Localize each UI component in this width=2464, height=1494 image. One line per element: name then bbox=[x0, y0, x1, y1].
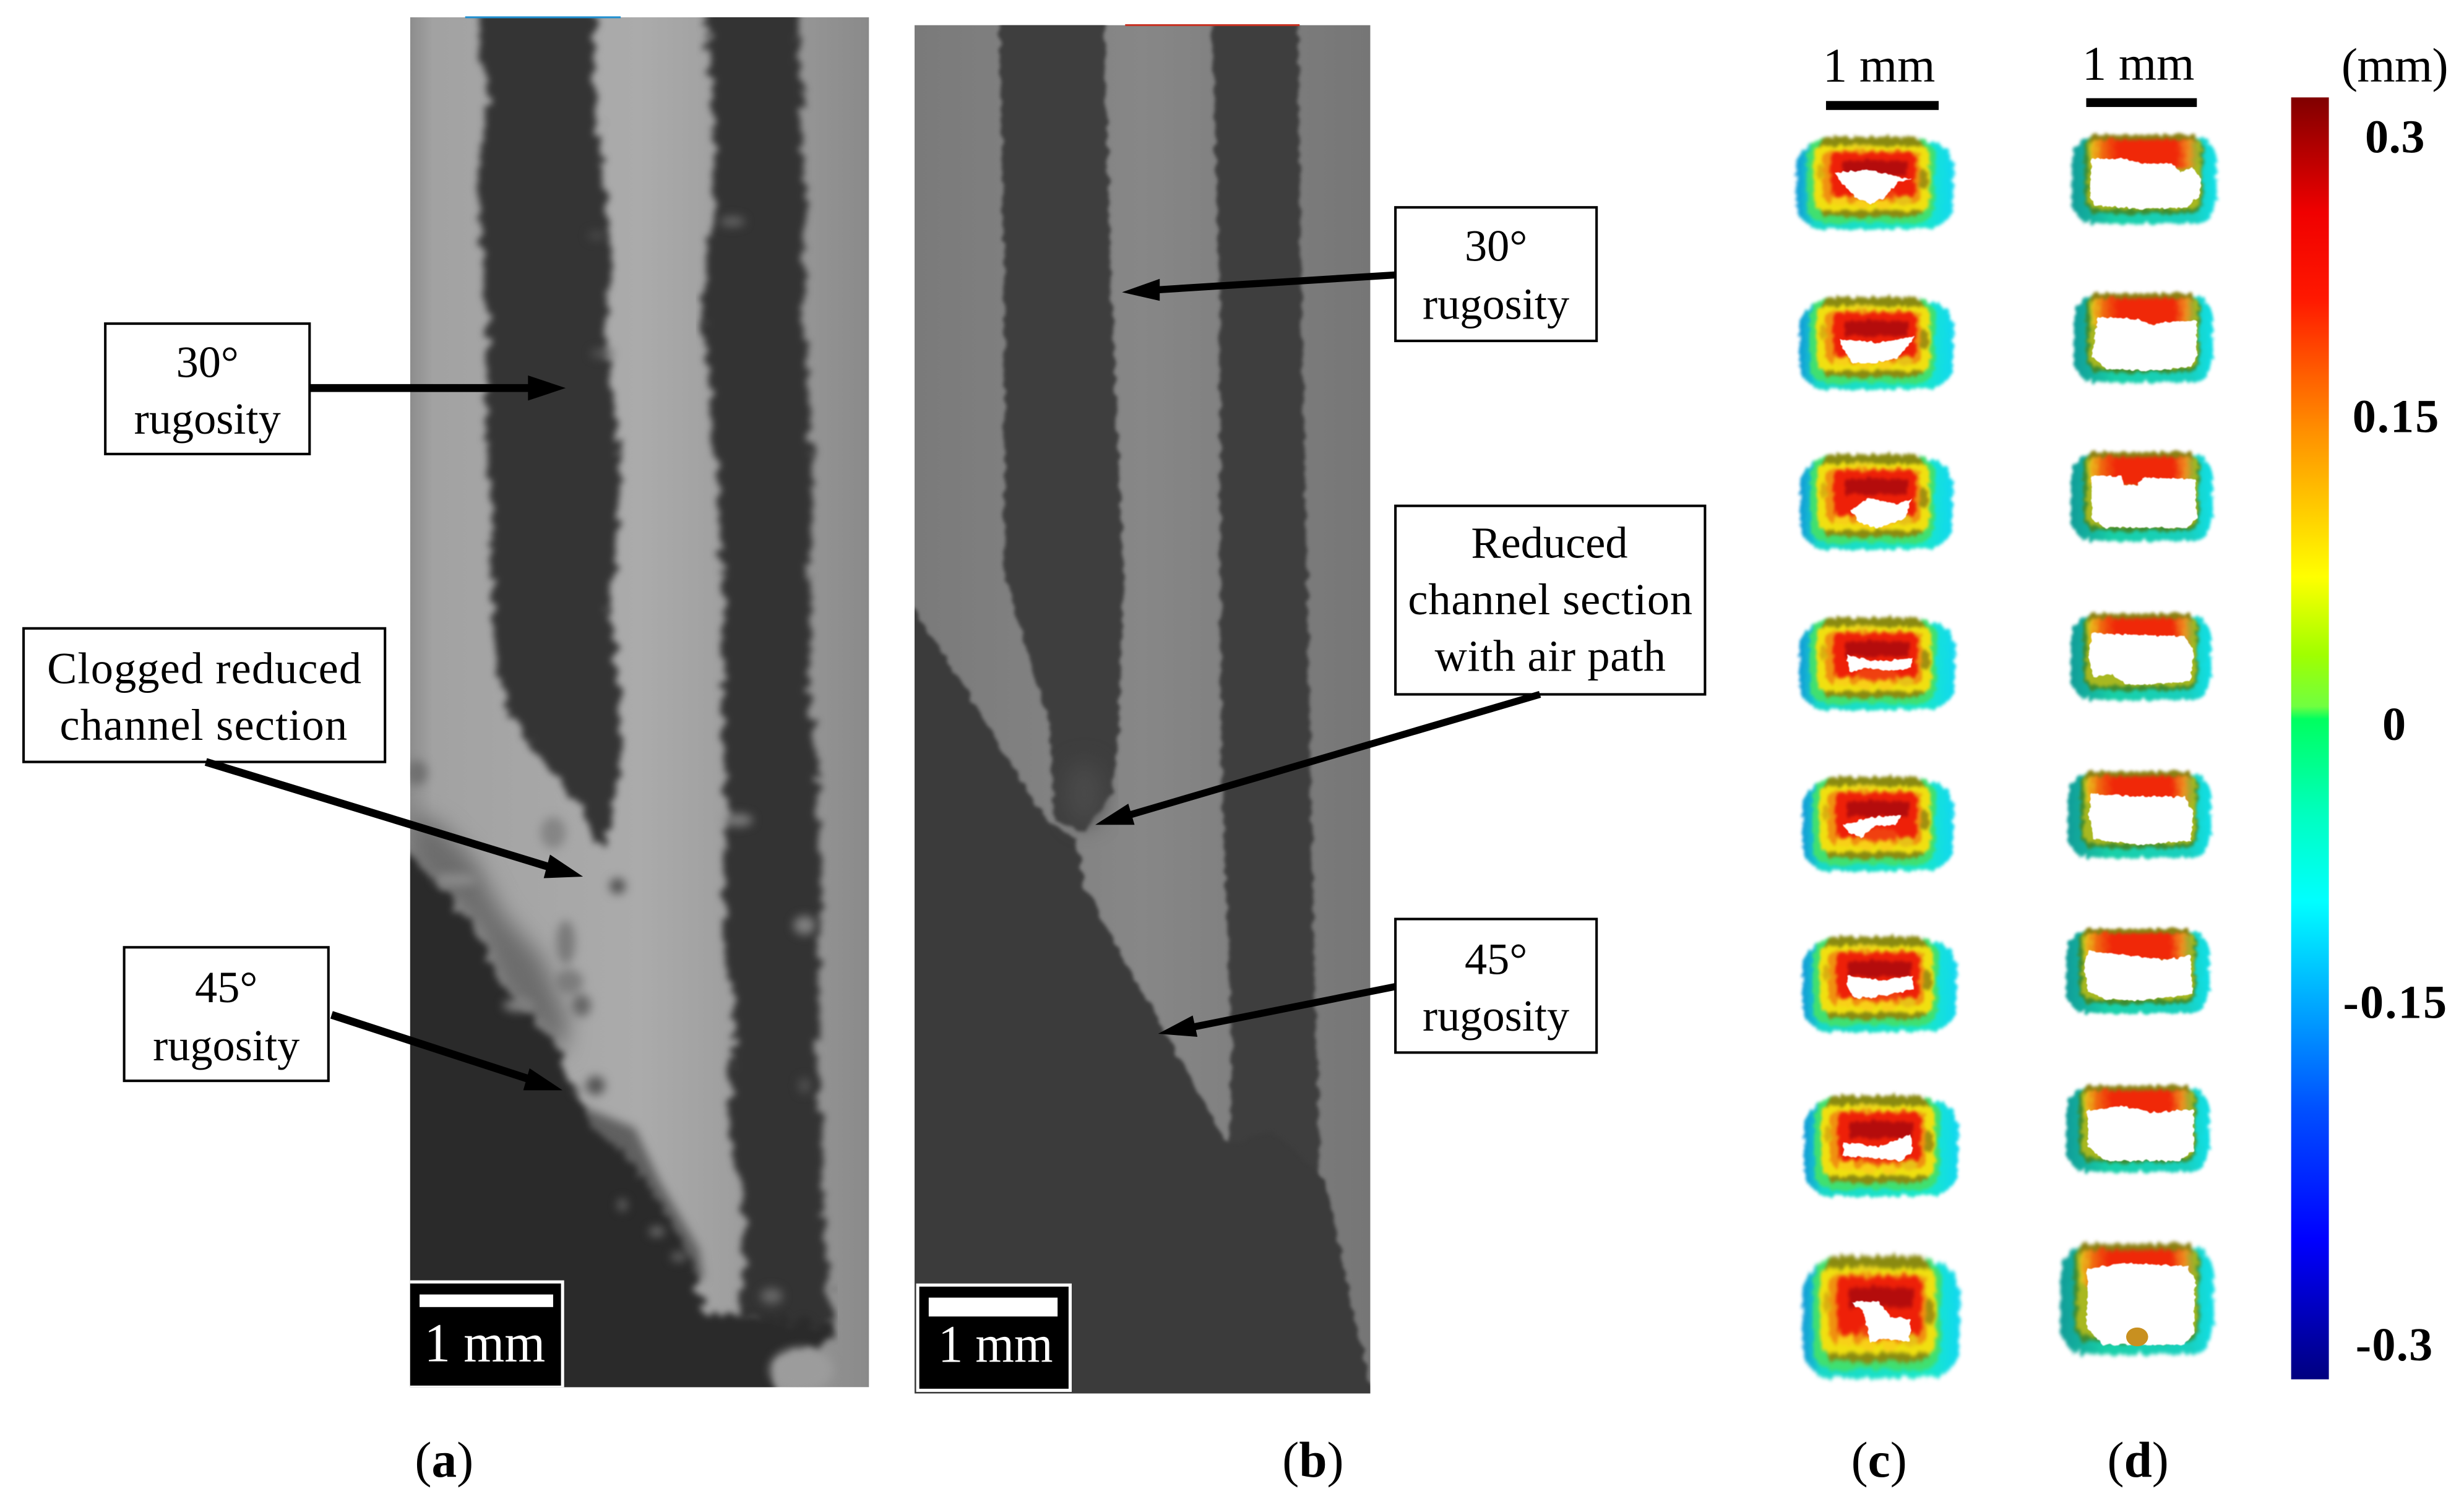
callout b: 30 rugosity bbox=[1395, 207, 1596, 341]
scale value 0.3: 0.3 bbox=[2365, 111, 2425, 163]
callout a: 45 rugosity bbox=[124, 947, 329, 1081]
scale c: 1 mm bbox=[1823, 39, 1935, 93]
edge band bbox=[585, 1107, 704, 1281]
arrow b: 30 rugosity bbox=[1122, 275, 1395, 301]
channel 2 bbox=[702, 0, 831, 1336]
callout b: reduced channel with air path: channel section bbox=[1408, 575, 1692, 624]
transition zone bbox=[410, 812, 569, 1055]
callout b: 45 rugosity bbox=[1395, 919, 1596, 1052]
lower dark region bbox=[393, 841, 831, 1414]
column c: deviation maps bbox=[1796, 137, 1960, 1378]
callout b: reduced channel with air path bbox=[1395, 506, 1705, 694]
map d6 bbox=[2066, 929, 2210, 1013]
map d1 bbox=[2072, 135, 2216, 223]
callout b: reduced channel with air path: Reduced bbox=[1471, 518, 1628, 567]
callout b: 45 rugosity: rugosity bbox=[1423, 991, 1569, 1041]
label d: (d) bbox=[2108, 1432, 2169, 1488]
map c1 bbox=[1796, 137, 1954, 230]
arrow a: 30 rugosity bbox=[309, 376, 566, 401]
map c6 bbox=[1803, 937, 1957, 1032]
panel a: micrograph bbox=[393, 0, 869, 1414]
callout a: 30 rugosity: 30° bbox=[176, 337, 239, 387]
scale d: 1 mm bbox=[2082, 37, 2194, 91]
unit label: (mm) bbox=[2341, 39, 2449, 93]
colour bar bbox=[2291, 39, 2449, 1380]
channel 1 bbox=[996, 0, 1124, 833]
map c7 bbox=[1804, 1096, 1958, 1196]
callout b: 30 rugosity: 30° bbox=[1465, 221, 1527, 271]
map c3 bbox=[1800, 454, 1952, 549]
callout a: clogged channel: Clogged reduced bbox=[47, 644, 361, 693]
callout a: 30 rugosity bbox=[105, 324, 309, 454]
air path haze bbox=[1066, 762, 1103, 825]
panel b: micrograph bbox=[896, 0, 1383, 1414]
callout a: 30 rugosity: rugosity bbox=[134, 394, 281, 444]
scale bar a: 1 mm bbox=[424, 1313, 545, 1373]
scale bar b bbox=[916, 1284, 1072, 1392]
map c5 bbox=[1803, 776, 1954, 871]
callout a: clogged channel: channel section bbox=[60, 700, 347, 750]
scale bar a bbox=[410, 1281, 564, 1387]
channel 1 bbox=[468, 0, 622, 845]
arrow a: clogged channel bbox=[206, 762, 583, 878]
top blue line bbox=[465, 16, 621, 18]
callout a: 45 rugosity: rugosity bbox=[153, 1021, 299, 1070]
scale value -0.15: -0.15 bbox=[2343, 977, 2447, 1029]
scale value -0.3: -0.3 bbox=[2356, 1319, 2432, 1371]
end blob bbox=[770, 1348, 833, 1392]
map d7 bbox=[2066, 1086, 2210, 1172]
callout b: 30 rugosity: rugosity bbox=[1423, 280, 1569, 329]
channel 2 bbox=[1208, 25, 1323, 1180]
map c4 bbox=[1799, 617, 1955, 710]
map d4 bbox=[2071, 614, 2211, 700]
arrow a: 45 rugosity bbox=[332, 1015, 562, 1090]
callout a: 45 rugosity: 45° bbox=[195, 963, 257, 1012]
arrow b: reduced channel bbox=[1095, 694, 1540, 825]
scale value 0: 0 bbox=[2382, 698, 2406, 750]
label a: (a) bbox=[415, 1432, 473, 1488]
rugosity blotches bbox=[405, 217, 816, 1304]
label c: (c) bbox=[1851, 1432, 1907, 1488]
map d8 bbox=[2061, 1243, 2214, 1354]
top red line bbox=[1125, 24, 1299, 26]
label b: (b) bbox=[1282, 1432, 1344, 1488]
arrow b: 45 rugosity bbox=[1158, 987, 1395, 1037]
map c8 bbox=[1803, 1256, 1960, 1378]
map d2 bbox=[2074, 293, 2213, 382]
scale bar b: 1 mm bbox=[938, 1315, 1053, 1374]
callout b: reduced channel with air path: with air path bbox=[1435, 631, 1666, 680]
map d3 bbox=[2071, 452, 2213, 541]
scale value 0.15: 0.15 bbox=[2353, 390, 2439, 442]
callout b: 45 rugosity: 45° bbox=[1465, 934, 1527, 984]
map c2 bbox=[1799, 297, 1954, 390]
column d: deviation maps bbox=[2061, 135, 2216, 1354]
map d5 bbox=[2068, 771, 2211, 858]
callout a: clogged channel bbox=[24, 629, 385, 762]
lower dark region bbox=[896, 594, 1383, 1414]
